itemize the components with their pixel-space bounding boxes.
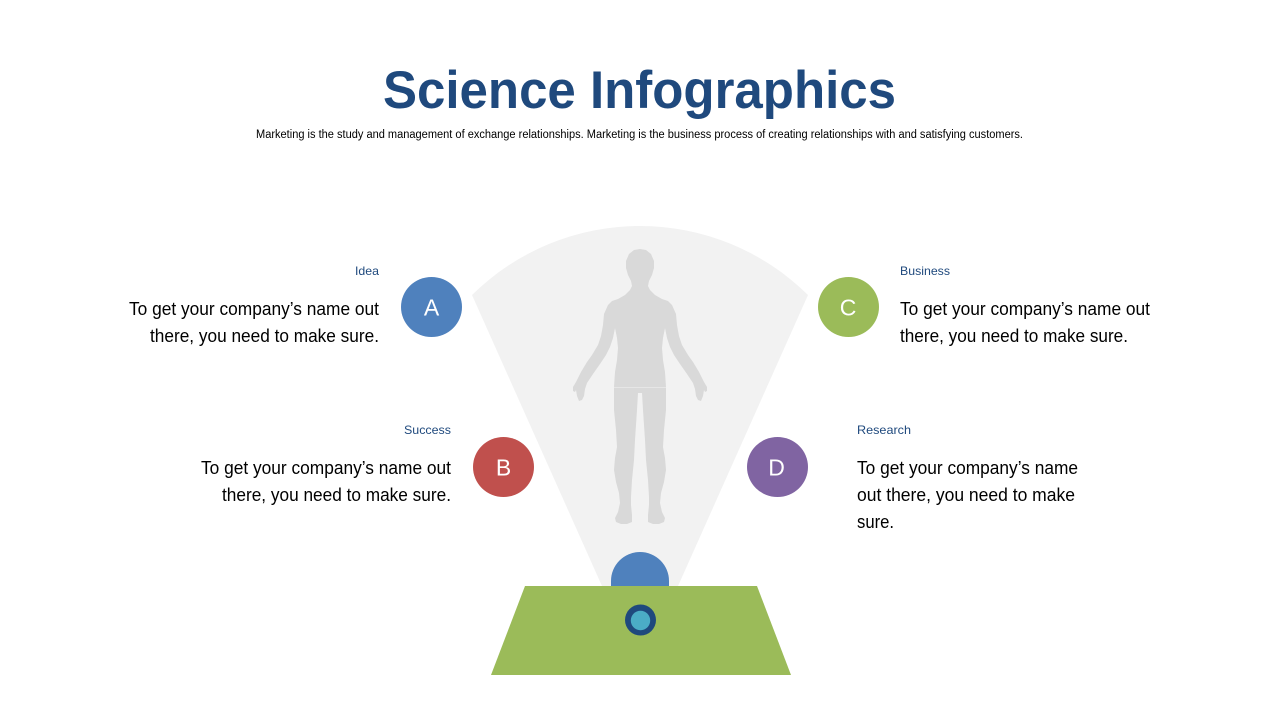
item D: Research: To get your company’s name [857, 458, 1078, 478]
item A: Idea: To get your company’s name out [129, 299, 379, 319]
item C: Business: To get your company’s name out [900, 299, 1150, 319]
central diagram [472, 226, 808, 675]
item B: Success [201, 423, 534, 505]
item B: Success: To get your company’s name out [201, 458, 451, 478]
item B: Success: B [496, 454, 511, 480]
item C: Business: there, you need to make sure. [900, 326, 1128, 346]
item C: Business [818, 264, 1150, 346]
item C: Business: Business [900, 264, 950, 278]
item D: Research: sure. [857, 512, 894, 532]
item B: Success: there, you need to make sure. [222, 485, 451, 505]
item C: Business: C [840, 294, 856, 320]
item A: Idea: A [424, 294, 440, 320]
green trapezoid base [491, 586, 791, 675]
item A: Idea: there, you need to make sure. [150, 326, 379, 346]
item B: Success: Success [404, 423, 451, 437]
item A: Idea: Idea [355, 264, 379, 278]
item D: Research: D [768, 454, 785, 480]
item A: Idea [129, 264, 462, 346]
item D: Research [747, 423, 1078, 532]
light fan beam [472, 226, 808, 604]
item D: Research: Research [857, 423, 911, 437]
blue dome [611, 552, 669, 587]
title: Science Infographics [383, 61, 896, 120]
item D: Research: out there, you need to make [857, 485, 1075, 505]
human silhouette [573, 249, 707, 524]
subtitle: Marketing is the study and management of exchange relationships. Marketing is the business process of creating relationships with and satisfying customers. [256, 129, 1023, 141]
base lens [625, 604, 656, 636]
